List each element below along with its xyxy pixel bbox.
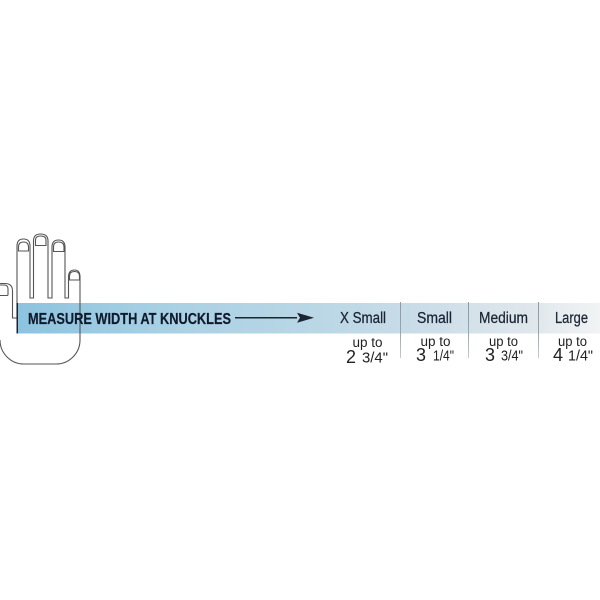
column: Medium: up to: [489, 334, 518, 349]
column: Small: [416, 310, 454, 365]
column: X Small: X Small: [340, 310, 386, 327]
column: X Small: 2: [346, 346, 356, 367]
icon: hand outline: [0, 234, 80, 364]
column: Medium: 3/4": [501, 348, 523, 364]
column: Large: up to: [558, 334, 587, 349]
column: Medium: Medium: [479, 310, 528, 327]
heading: measure width at knuckles: MEASURE WIDTH AT KNUCKLES: [28, 311, 231, 328]
arrow: [235, 313, 314, 323]
column: Large: 1/4": [568, 348, 593, 364]
column: X Small: 3/4": [362, 350, 388, 366]
measure start line: [16, 303, 18, 334]
column: X Small: up to: [352, 335, 382, 350]
column: Small: Small: [417, 310, 452, 327]
column: Medium: 3: [485, 344, 495, 365]
column: Large: [553, 310, 593, 365]
measurement band: [17, 303, 600, 334]
column: Small: 1/4": [433, 348, 454, 364]
column: Medium: [479, 310, 528, 365]
column: Large: 4: [553, 344, 563, 365]
column: Large: Large: [555, 310, 588, 327]
column dividers: [400, 302, 539, 358]
column: Small: 3: [416, 344, 426, 365]
column: Small: up to: [420, 334, 450, 349]
column: X Small: [340, 310, 388, 367]
